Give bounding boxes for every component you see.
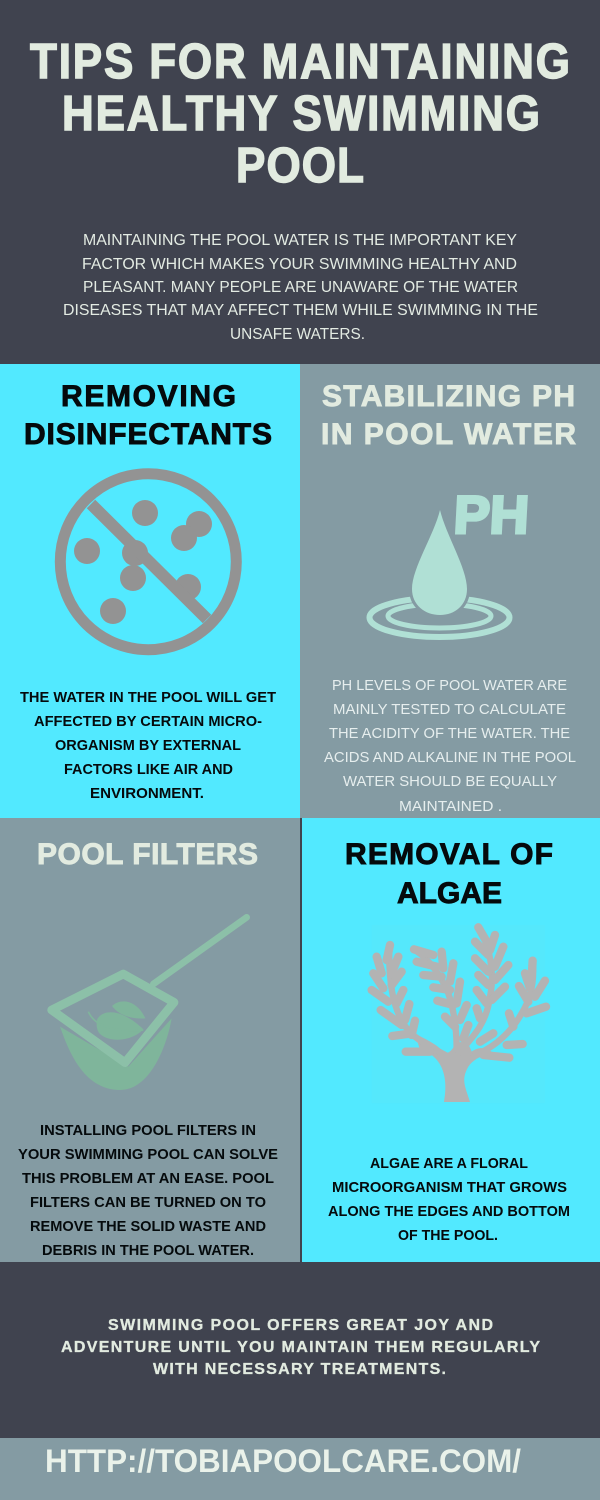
heading: removal of algae	[345, 838, 553, 910]
footer url bar	[0, 1438, 600, 1500]
body text: ph	[324, 677, 576, 815]
body text: algae: ALONG THE EDGES AND BOTTOM	[328, 1203, 570, 1220]
heading: stabilizing ph: STABILIZING PH	[322, 380, 575, 413]
closing message	[61, 1317, 540, 1378]
body text: ph: MAINLY TESTED TO CALCULATE	[333, 701, 566, 718]
panel: stabilizing ph	[300, 364, 600, 818]
body text: filters: DEBRIS IN THE POOL WATER.	[42, 1242, 254, 1259]
body text: algae: OF THE POOL.	[398, 1227, 498, 1244]
body text: filters: YOUR SWIMMING POOL CAN SOLVE	[18, 1146, 278, 1163]
body text: ph: PH LEVELS OF POOL WATER ARE	[332, 677, 567, 694]
body text: disinfectants: FACTORS LIKE AIR AND	[64, 761, 233, 778]
panel: pool filters	[0, 818, 300, 1262]
closing message: WITH NECESSARY TREATMENTS.	[153, 1361, 446, 1378]
heading: stabilizing ph	[321, 380, 576, 451]
intro text: FACTOR WHICH MAKES YOUR SWIMMING HEALTHY AND	[82, 256, 517, 273]
panel: removing disinfectants	[0, 364, 300, 818]
icon: water drop with ph	[370, 486, 530, 637]
body text: disinfectants	[20, 689, 276, 802]
body text: disinfectants: ORGANISM BY EXTERNAL	[55, 737, 241, 754]
body text: disinfectants: THE WATER IN THE POOL WILL GET	[20, 689, 276, 706]
intro text: MAINTAINING THE POOL WATER IS THE IMPORTANT KEY	[83, 232, 517, 249]
body text: algae	[328, 1155, 570, 1244]
heading: removal of algae: REMOVAL OF	[345, 838, 553, 871]
icon: water drop with ph: PH	[452, 486, 530, 545]
body text: filters	[18, 1122, 278, 1259]
closing message: ADVENTURE UNTIL YOU MAINTAIN THEM REGULARLY	[61, 1339, 540, 1356]
body text: ph: WATER SHOULD BE EQUALLY	[343, 773, 557, 790]
title	[30, 34, 570, 193]
body text: disinfectants: AFFECTED BY CERTAIN MICRO-	[34, 713, 262, 730]
heading: pool filters: POOL FILTERS	[37, 838, 258, 871]
body text: filters: THIS PROBLEM AT AN EASE. POOL	[22, 1170, 274, 1187]
body text: filters: REMOVE THE SOLID WASTE AND	[30, 1218, 266, 1235]
header panel	[30, 34, 570, 343]
intro text	[63, 232, 538, 343]
body text: ph: THE ACIDITY OF THE WATER. THE	[329, 725, 570, 742]
body text: disinfectants: ENVIRONMENT.	[90, 785, 204, 802]
body text: filters: INSTALLING POOL FILTERS IN	[40, 1122, 256, 1139]
body text: filters: FILTERS CAN BE TURNED ON TO	[30, 1194, 266, 1211]
intro text: PLEASANT. MANY PEOPLE ARE UNAWARE OF THE WATER	[83, 279, 518, 296]
heading: removal of algae: ALGAE	[397, 877, 502, 910]
heading: stabilizing ph: IN POOL WATER	[321, 418, 576, 451]
heading: removing disinfectants	[24, 380, 272, 451]
footer url bar: HTTP://TOBIAPOOLCARE.COM/	[45, 1443, 521, 1479]
intro text: UNSAFE WATERS.	[230, 326, 365, 343]
heading: removing disinfectants: DISINFECTANTS	[24, 418, 272, 451]
icon: prohibited microbes	[60, 474, 236, 650]
icon: skimmer net	[52, 917, 247, 1090]
heading: removing disinfectants: REMOVING	[61, 380, 236, 413]
title: HEALTHY SWIMMING	[62, 86, 540, 141]
body text: algae: ALGAE ARE A FLORAL	[370, 1155, 528, 1172]
title: TIPS FOR MAINTAINING	[30, 34, 570, 89]
body text: ph: ACIDS AND ALKALINE IN THE POOL	[324, 749, 576, 766]
closing message: SWIMMING POOL OFFERS GREAT JOY AND	[108, 1317, 493, 1334]
body text: algae: MICROORGANISM THAT GROWS	[332, 1179, 567, 1196]
panel: removal of algae	[302, 818, 600, 1262]
icon: algae	[372, 925, 546, 1103]
intro text: DISEASES THAT MAY AFFECT THEM WHILE SWIMMING IN THE	[63, 302, 538, 319]
title: POOL	[236, 138, 364, 193]
body text: ph: MAINTAINED .	[399, 798, 502, 815]
